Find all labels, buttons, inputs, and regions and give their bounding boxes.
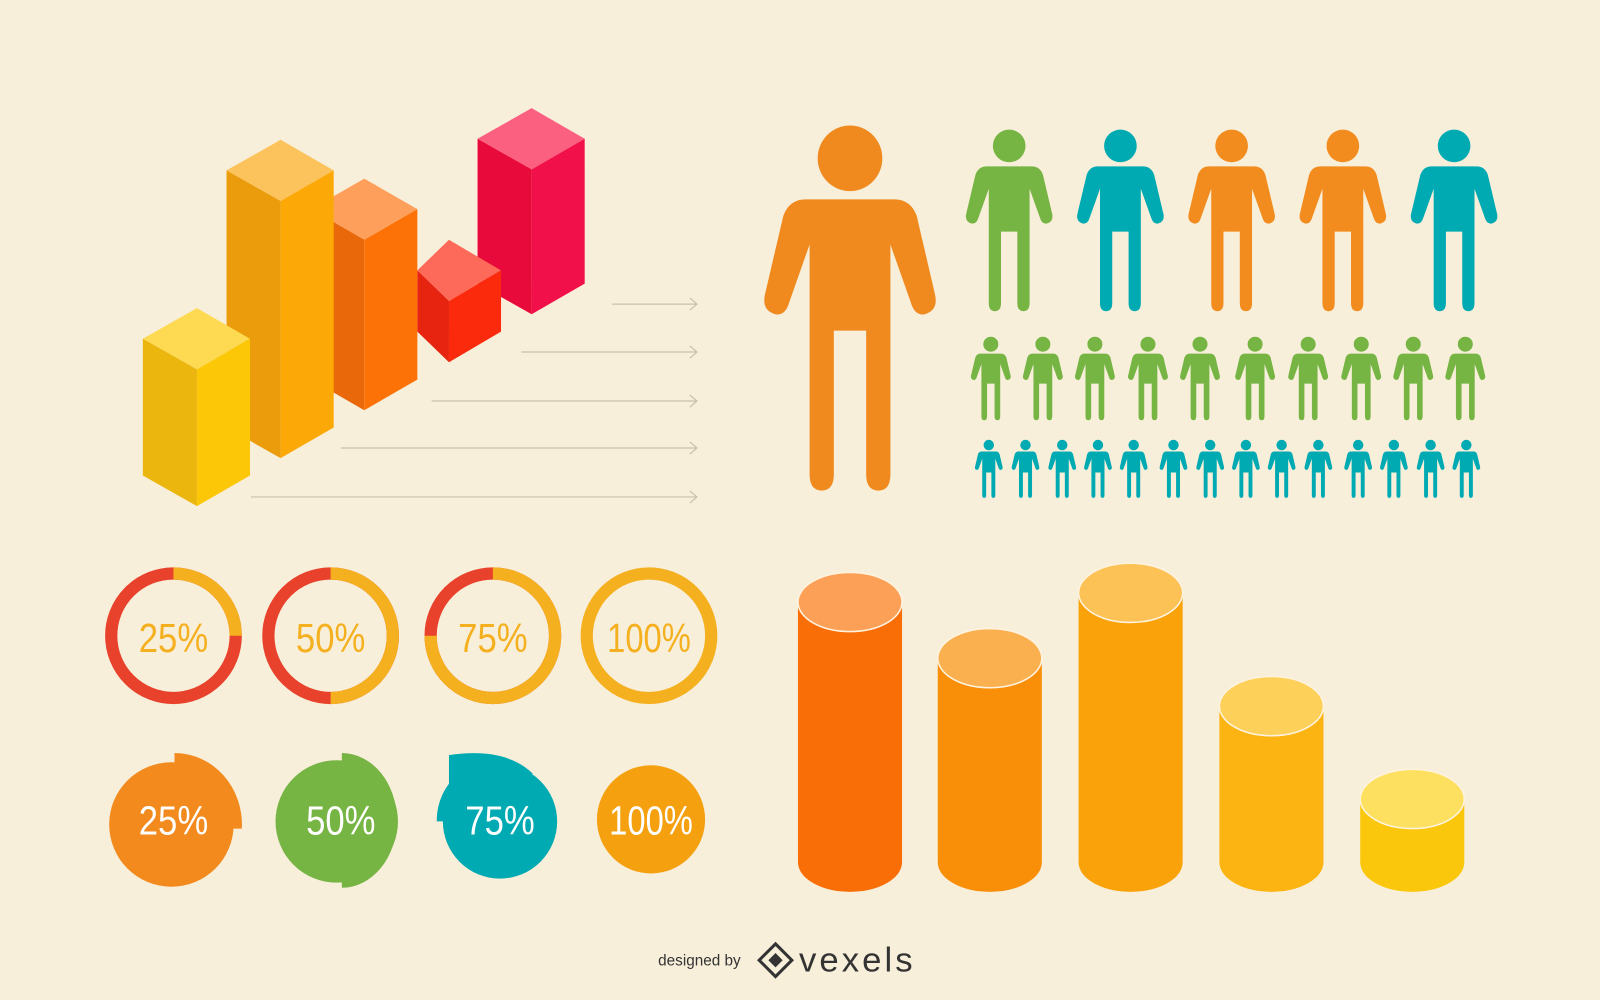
cylinder 5 (1360, 769, 1464, 892)
tiny people row (975, 440, 1480, 498)
cylinder 4 (1219, 677, 1323, 892)
bar: orange (311, 179, 417, 410)
pie 25%: 25% (139, 798, 208, 844)
footer credit: vexels (799, 941, 916, 979)
ring charts (111, 573, 711, 698)
bar: amber (227, 140, 334, 458)
pie 75%: 75% (465, 798, 535, 844)
cylinder 3 (1079, 563, 1183, 892)
ring 25% (111, 573, 236, 698)
pie 100%: 100% (609, 798, 693, 844)
ring 50%: 50% (296, 615, 365, 661)
ring 100% (587, 573, 711, 698)
pie charts (109, 753, 705, 888)
footer credit: designed by (658, 952, 741, 969)
cylinder chart (798, 563, 1464, 892)
ring 100%: 100% (607, 615, 691, 661)
icon: big person (764, 126, 936, 491)
bar: red (417, 240, 501, 362)
arrows (251, 298, 697, 503)
bar: yellow (143, 308, 250, 506)
cylinder 1 (798, 572, 902, 892)
pie 25% (109, 753, 242, 887)
ring 75%: 75% (458, 615, 528, 661)
medium people row (966, 130, 1497, 311)
small people row (971, 337, 1485, 420)
isometric bar chart (143, 108, 585, 506)
pie 75% (437, 753, 557, 879)
pie 50% (276, 753, 398, 888)
pie 50%: 50% (306, 798, 376, 844)
ring 25%: 25% (139, 615, 208, 661)
cylinder 2 (938, 629, 1042, 892)
ring 75% (431, 573, 555, 698)
footer credit (658, 941, 916, 979)
pie 100% (597, 765, 705, 873)
bar: pink (478, 108, 585, 314)
ring 50% (268, 573, 393, 698)
icon: vexels logo (759, 944, 792, 977)
